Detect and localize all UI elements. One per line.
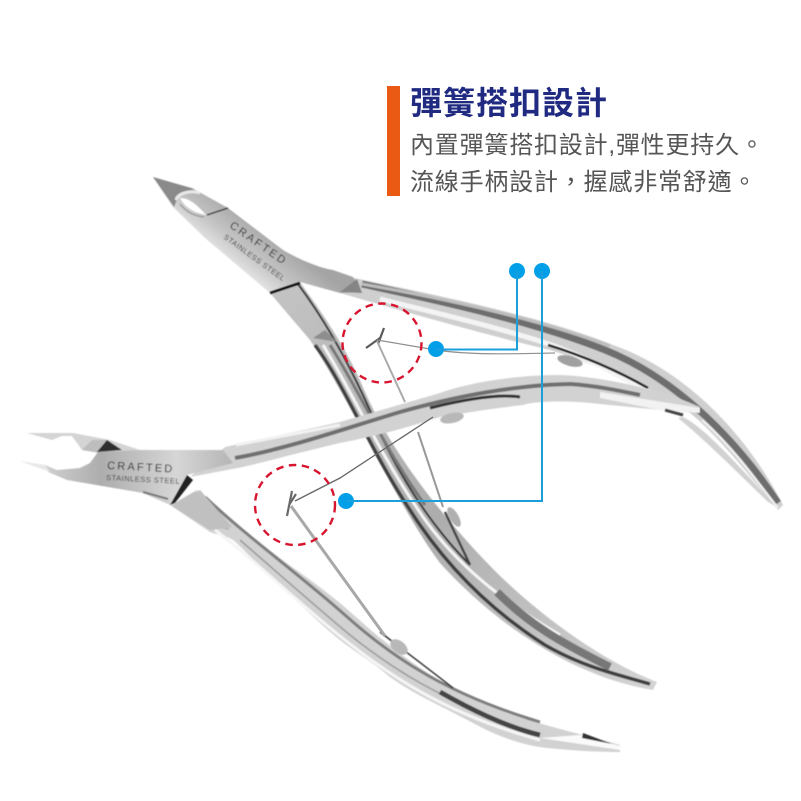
top nipper head (153, 177, 362, 342)
nipper: top (153, 177, 783, 690)
text line 2: 流線手柄設計，握感非常舒適。 (410, 169, 757, 196)
rivet (387, 636, 411, 658)
brand text on top head: STAINLESS STEEL (222, 232, 287, 283)
accent bar (387, 86, 400, 196)
rivet (445, 505, 463, 529)
brand text on bottom head: CRAFTED (107, 460, 175, 476)
heading: 彈簧搭扣設計 (410, 85, 608, 121)
dashed circle: top spring (342, 304, 422, 382)
callout line: bottom spring (338, 263, 550, 509)
callout line: top spring (428, 263, 525, 357)
bottom spring wire (287, 417, 433, 636)
top nipper upper handle (340, 276, 783, 510)
bottom nipper upper handle (190, 375, 700, 477)
brand text on bottom head (106, 460, 180, 486)
dashed circle: bottom spring (255, 465, 335, 545)
brand text on bottom head: STAINLESS STEEL (106, 473, 180, 486)
top spring wire (366, 328, 555, 507)
text line 1: 內置彈簧搭扣設計,彈性更持久。 (410, 132, 765, 159)
rivet (556, 353, 584, 369)
top nipper lower handle (270, 282, 657, 690)
brand text on top head: CRAFTED (227, 220, 289, 268)
nipper: bottom (20, 375, 700, 752)
bottom nipper head (20, 433, 233, 530)
bottom nipper lower handle (170, 490, 620, 752)
